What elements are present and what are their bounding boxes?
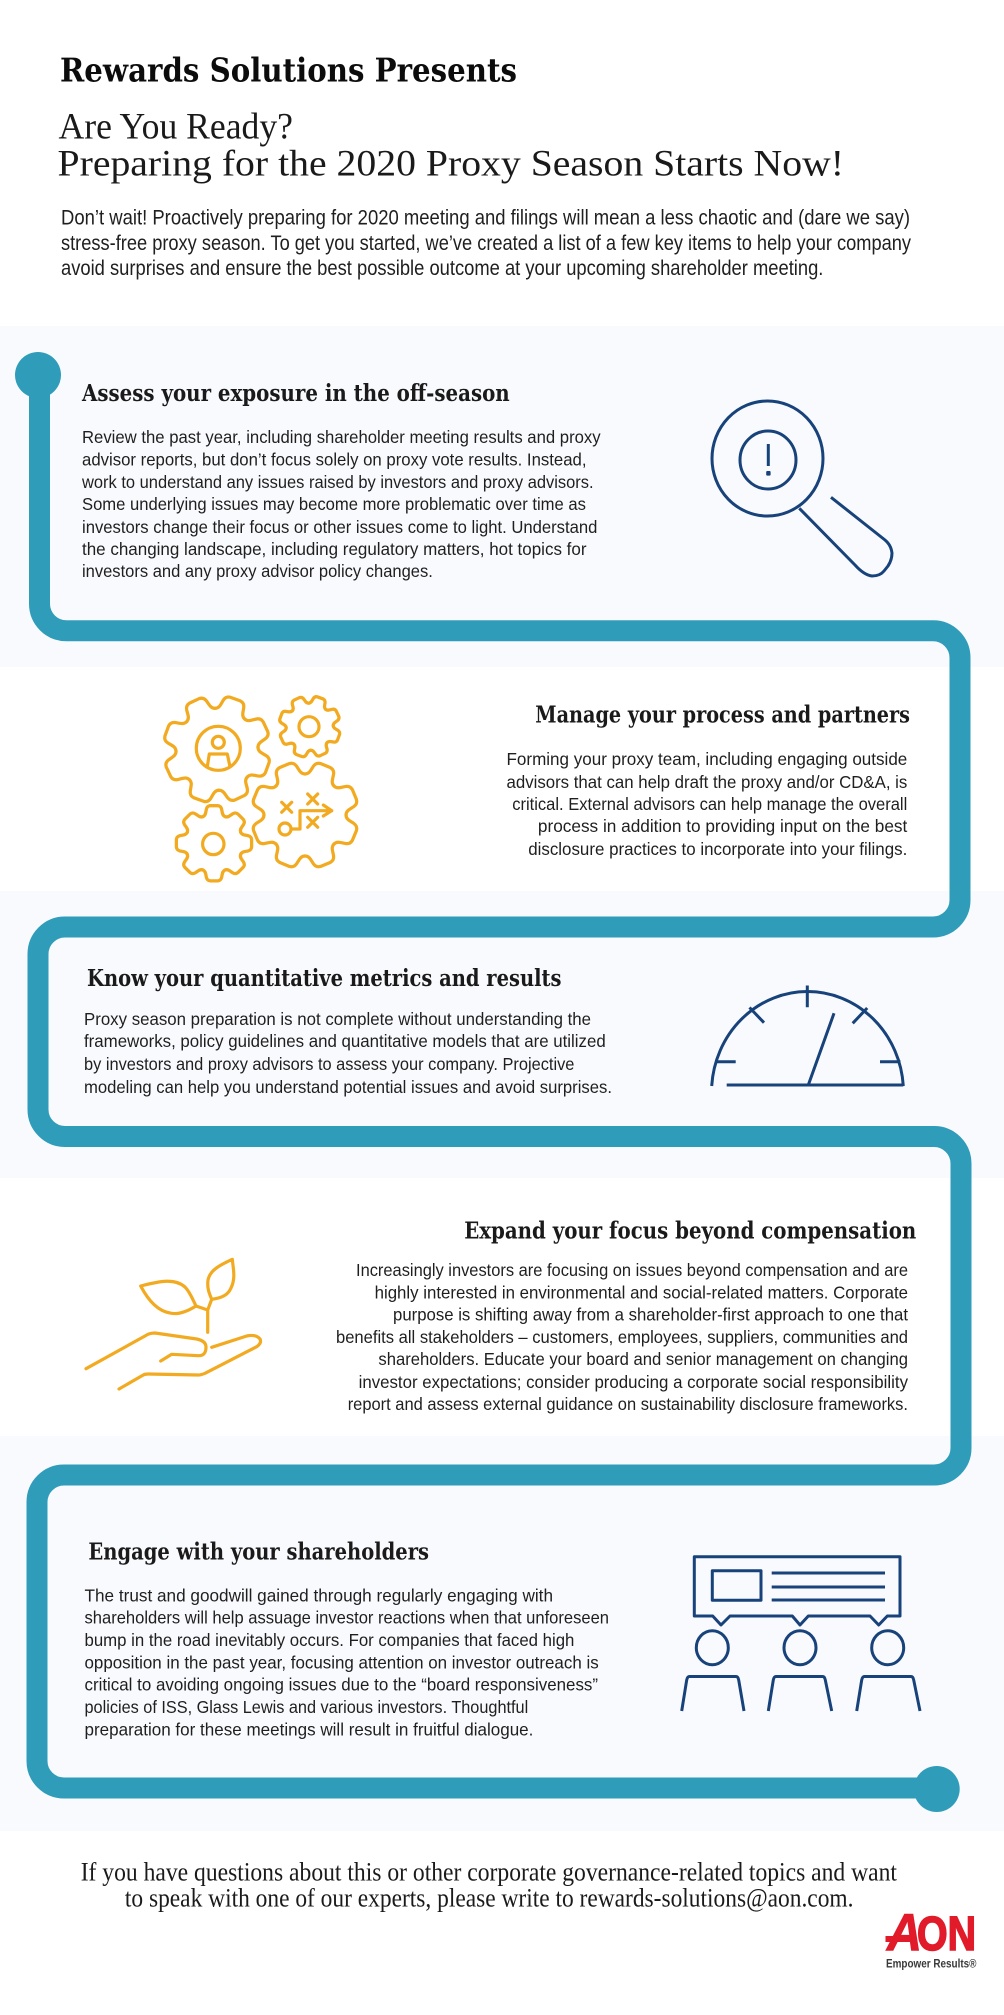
body text <box>81 427 601 581</box>
body text: highly interested in environmental and social-related matters. Corporate <box>375 1282 908 1302</box>
body text: Some underlying issues may become more problematic over time as <box>82 494 586 514</box>
body text <box>84 1586 609 1739</box>
subtitle: Preparing for the 2020 Proxy Season Starts Now! <box>58 142 844 183</box>
small gear top right <box>270 687 349 766</box>
winding track connecting the sections <box>15 352 961 1812</box>
panel band: section 5 background <box>0 1436 1004 1831</box>
logo: Aon: ON <box>917 1908 976 1961</box>
icon: hand holding plant <box>86 1259 261 1389</box>
heading: Assess your exposure in the off-season <box>81 379 510 407</box>
body text: investor expectations; consider producing a corporate social responsibility <box>359 1372 908 1392</box>
body text: bump in the road inevitably occurs. For companies that faced high <box>84 1630 574 1650</box>
body text: opposition in the past year, focusing attention on investor outreach is <box>84 1652 599 1672</box>
subtitle: Are You Ready? <box>58 105 293 146</box>
panel: manage your process <box>148 681 910 885</box>
title: Rewards Solutions Presents <box>60 51 517 90</box>
body text: disclosure practices to incorporate into your filings. <box>528 839 907 859</box>
body text: purpose is shifting away from a shareholder-first approach to one that <box>393 1304 908 1324</box>
body text: critical to avoiding ongoing issues due to the “board responsiveness” <box>84 1675 598 1695</box>
footer call to action <box>81 1858 898 1912</box>
footer call to action: If you have questions about this or other corporate governance-related topics and want <box>81 1858 898 1887</box>
body text: Review the past year, including shareholder meeting results and proxy <box>82 427 601 447</box>
body text: shareholders will help assuage investor reactions when that unforeseen <box>84 1608 609 1628</box>
icon: gears <box>148 681 375 885</box>
intro paragraph: avoid surprises and ensure the best possible outcome at your upcoming shareholder meeting. <box>61 257 823 280</box>
panel: engage with shareholders <box>84 1537 920 1739</box>
logo: Aon <box>885 1904 977 1971</box>
logo: Aon: A <box>885 1904 922 1962</box>
body text: modeling can help you understand potential issues and avoid surprises. <box>84 1077 612 1097</box>
heading: Engage with your shareholders <box>88 1537 429 1565</box>
heading: Expand your focus beyond compensation <box>464 1216 916 1244</box>
logo: Aon: Empower Results® <box>886 1957 977 1971</box>
body text: Forming your proxy team, including engaging outside <box>506 749 907 769</box>
body text <box>336 1260 908 1414</box>
body text: the changing landscape, including regulatory matters, hot topics for <box>82 539 587 559</box>
panel band: section 3 background <box>0 891 1004 1178</box>
subtitle <box>58 105 844 183</box>
body text: process in addition to providing input on the best <box>538 816 907 836</box>
track end dot <box>914 1766 960 1812</box>
gear with strategy play <box>235 745 375 885</box>
header block <box>58 51 912 280</box>
heading: Manage your process and partners <box>535 700 910 728</box>
body text: frameworks, policy guidelines and quantitative models that are utilized <box>84 1031 606 1051</box>
body text: work to understand any issues raised by investors and proxy advisors. <box>81 472 594 492</box>
body text: advisor reports, but don’t focus solely on proxy vote results. Instead, <box>82 450 586 470</box>
body text: The trust and goodwill gained through regularly engaging with <box>84 1586 553 1606</box>
icon: presenters with speech bubble <box>682 1557 920 1711</box>
body text: investors change their focus or other issues come to light. Understand <box>82 517 597 537</box>
intro paragraph: stress-free proxy season. To get you started, we’ve created a list of a few key items to help your company <box>61 232 912 255</box>
body text: critical. External advisors can help manage the overall <box>512 794 907 814</box>
body text: investors and any proxy advisor policy changes. <box>82 561 433 581</box>
heading: Know your quantitative metrics and results <box>87 964 562 992</box>
body text: advisors that can help draft the proxy and/or CD&A, is <box>506 772 907 792</box>
body text: policies of ISS, Glass Lewis and various investors. Thoughtful <box>84 1697 528 1717</box>
icon: gauge <box>712 986 903 1086</box>
body text <box>84 1009 612 1097</box>
panel band: section 1 background <box>0 326 1004 667</box>
gear with person <box>148 681 286 818</box>
body text: by investors and proxy advisors to assess your company. Projective <box>84 1054 574 1074</box>
icon: magnifying glass <box>712 401 892 576</box>
intro paragraph: Don’t wait! Proactively preparing for 2020 meeting and filings will mean a less chaotic and (dare we say) <box>61 207 910 230</box>
body text: benefits all stakeholders – customers, employees, suppliers, communities and <box>336 1327 908 1347</box>
panel: know your metrics <box>84 964 903 1097</box>
panel: assess your exposure <box>81 379 892 581</box>
track start dot <box>15 352 61 398</box>
body text: preparation for these meetings will result in fruitful dialogue. <box>84 1719 533 1739</box>
intro paragraph <box>61 207 912 280</box>
small gear bottom left <box>176 806 252 881</box>
footer call to action: to speak with one of our experts, please write to rewards-solutions@aon.com. <box>125 1883 853 1912</box>
panel: expand your focus <box>86 1216 916 1414</box>
body text: Increasingly investors are focusing on issues beyond compensation and are <box>356 1260 908 1280</box>
body text: report and assess external guidance on sustainability disclosure frameworks. <box>348 1394 908 1414</box>
body text: shareholders. Educate your board and senior management on changing <box>378 1349 908 1369</box>
body text <box>506 749 907 859</box>
body text: Proxy season preparation is not complete without understanding the <box>84 1009 591 1029</box>
